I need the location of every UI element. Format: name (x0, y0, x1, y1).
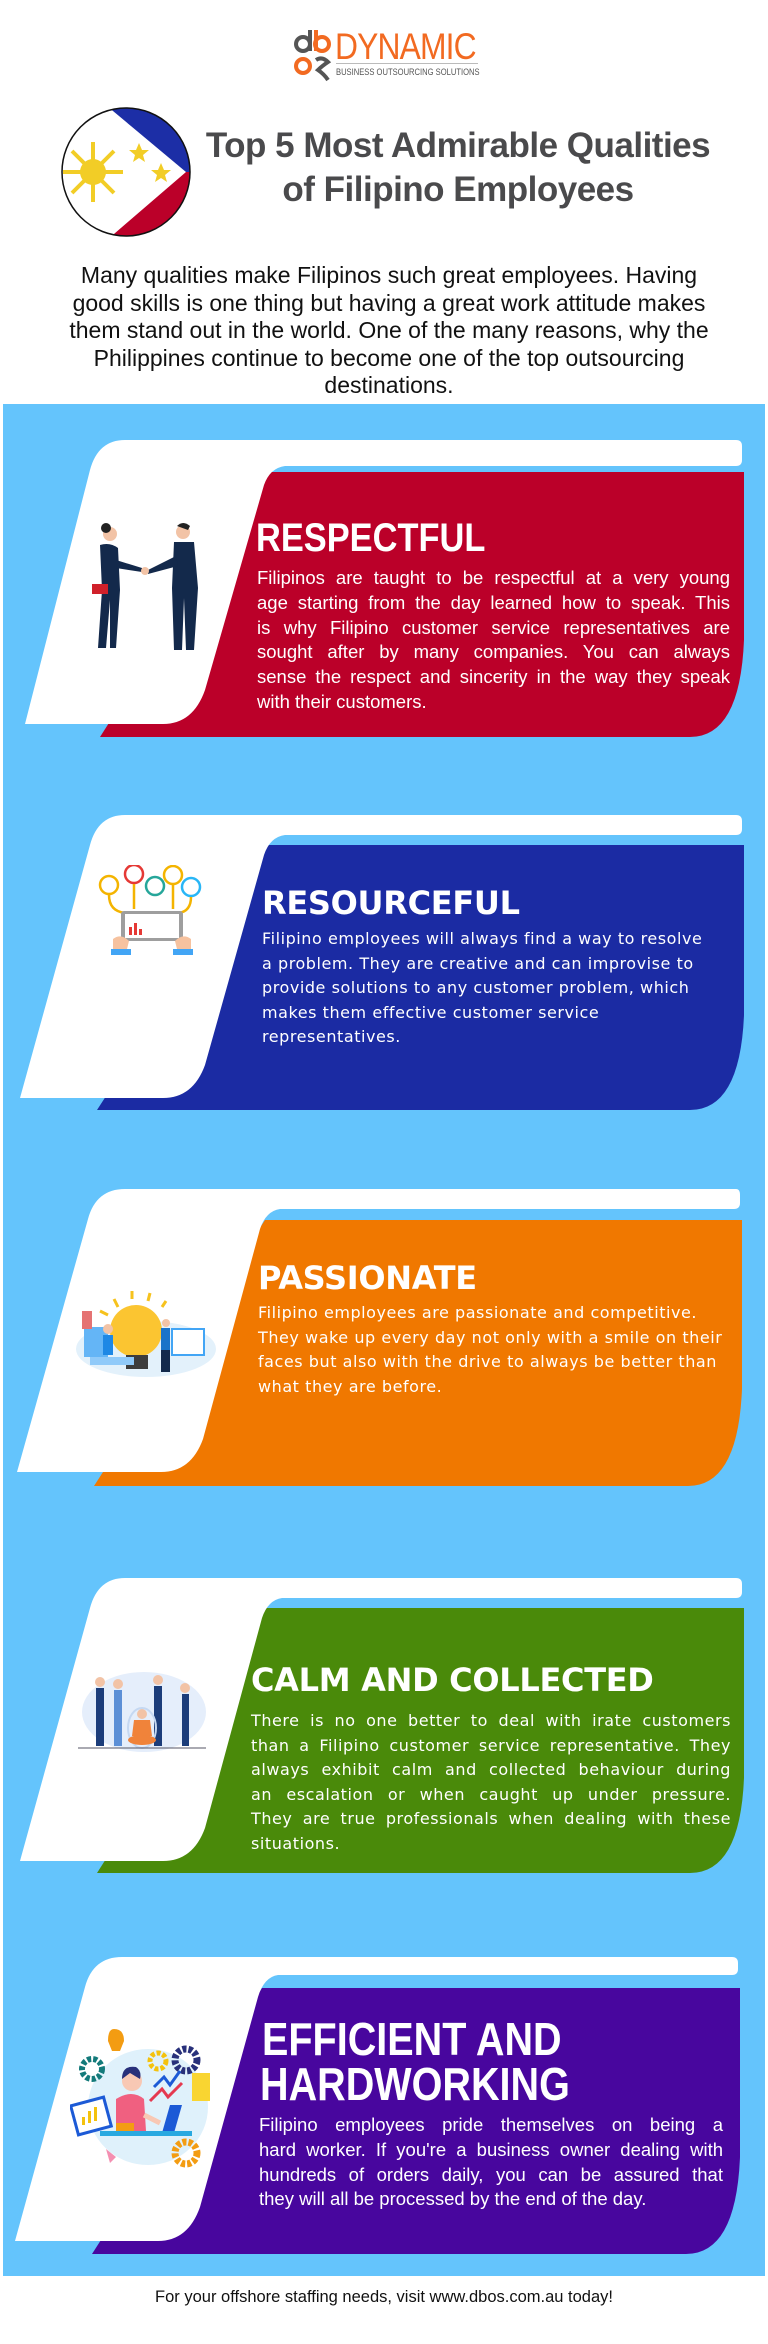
text: respectful: sought after by many companies. You can always (257, 641, 730, 662)
blue background (3, 404, 765, 2276)
text: efficient and hardworking: hard worker. If you're a business owner dealing with (259, 2139, 723, 2160)
intro text: them stand out in the world. One of the many reasons, why the (69, 317, 709, 343)
heading: efficient and hardworking: EFFICIENT AND (262, 2013, 562, 2065)
text: calm and collected: than a Filipino customer service representative. They (251, 1736, 731, 1754)
text: calm and collected: always exhibit calm and collected behaviour during (251, 1760, 731, 1779)
logo (294, 26, 480, 82)
text: resourceful: provide solutions to any customer problem, which (262, 978, 689, 997)
panel: respectful (25, 440, 744, 737)
title (206, 126, 710, 209)
panel: efficient and hardworking: HARDWORKING (260, 2058, 570, 2110)
intro text: Philippines continue to become one of the top outsourcing (94, 344, 684, 370)
heading: calm and collected: CALM AND COLLECTED (251, 1661, 654, 1699)
panel: resourceful (20, 815, 744, 1110)
logo: BUSINESS OUTSOURCING SOLUTIONS (336, 67, 480, 78)
icon: light bulb idea (76, 1291, 216, 1377)
text: resourceful: makes them effective customer service (262, 1002, 599, 1022)
title: Top 5 Most Admirable Qualities (206, 126, 710, 165)
text: respectful: with their customers. (257, 691, 427, 712)
text: respectful: Filipinos are taught to be respectful at a very young (257, 567, 730, 588)
text: calm and collected: They are true professionals when dealing with these (251, 1809, 731, 1828)
heading: passionate: PASSIONATE (258, 1259, 477, 1297)
panel: passionate (17, 1189, 742, 1486)
text: passionate: They wake up every day not only with a smile on their (258, 1328, 722, 1346)
icon: philippine flag (61, 107, 191, 237)
text: respectful: sense the respect and sincerity in the way they speak (257, 666, 730, 687)
text: resourceful: Filipino employees will always find a way to resolve (262, 929, 702, 948)
panel: efficient and hardworking (15, 1957, 740, 2254)
heading: resourceful: RESOURCEFUL (262, 884, 520, 922)
text: efficient and hardworking (259, 2114, 724, 2209)
text: efficient and hardworking: hundreds of orders daily, you can be assured that (259, 2164, 723, 2185)
intro text: good skills is one thing but having a great work attitude makes (73, 290, 705, 316)
text: passionate: faces but also with the drive to always be better than (258, 1352, 717, 1371)
footer text: For your offshore staffing needs, visit www.dbos.com.au today! (155, 2288, 613, 2306)
text: respectful: age starting from the day learned how to speak. This (257, 592, 730, 613)
icon: handshake people (92, 523, 198, 650)
text: calm and collected: situations. (251, 1834, 340, 1852)
text: calm and collected: an escalation or when caught up under pressure. (251, 1784, 731, 1804)
text: passionate (258, 1303, 722, 1396)
text: resourceful: representatives. (262, 1027, 401, 1046)
intro text: Many qualities make Filipinos such great employees. Having (81, 262, 697, 288)
panel: calm and collected (20, 1578, 744, 1873)
intro text: destinations. (324, 372, 454, 398)
text: efficient and hardworking: they will all be processed by the end of the day. (259, 2188, 646, 2209)
icon: calm people meditating (78, 1672, 206, 1752)
text: resourceful: a problem. They are creative and can improvise to (262, 954, 694, 972)
intro text (69, 262, 709, 398)
title: of Filipino Employees (282, 170, 634, 209)
icon: hardworking person with gears (70, 2029, 210, 2168)
text: passionate: Filipino employees are passionate and competitive. (258, 1303, 697, 1322)
text: respectful (257, 567, 730, 712)
text: respectful: is why Filipino customer service representatives are (257, 617, 730, 638)
logo: DYNAMIC (335, 26, 476, 67)
text: calm and collected: There is no one better to deal with irate customers (251, 1711, 731, 1730)
text: resourceful (262, 929, 702, 1046)
text: passionate: what they are before. (258, 1376, 442, 1396)
heading: respectful: RESPECTFUL (256, 516, 485, 560)
icon: tablet network (98, 865, 202, 955)
text: efficient and hardworking: Filipino employees pride themselves on being a (259, 2114, 723, 2135)
text: calm and collected (250, 1711, 731, 1852)
